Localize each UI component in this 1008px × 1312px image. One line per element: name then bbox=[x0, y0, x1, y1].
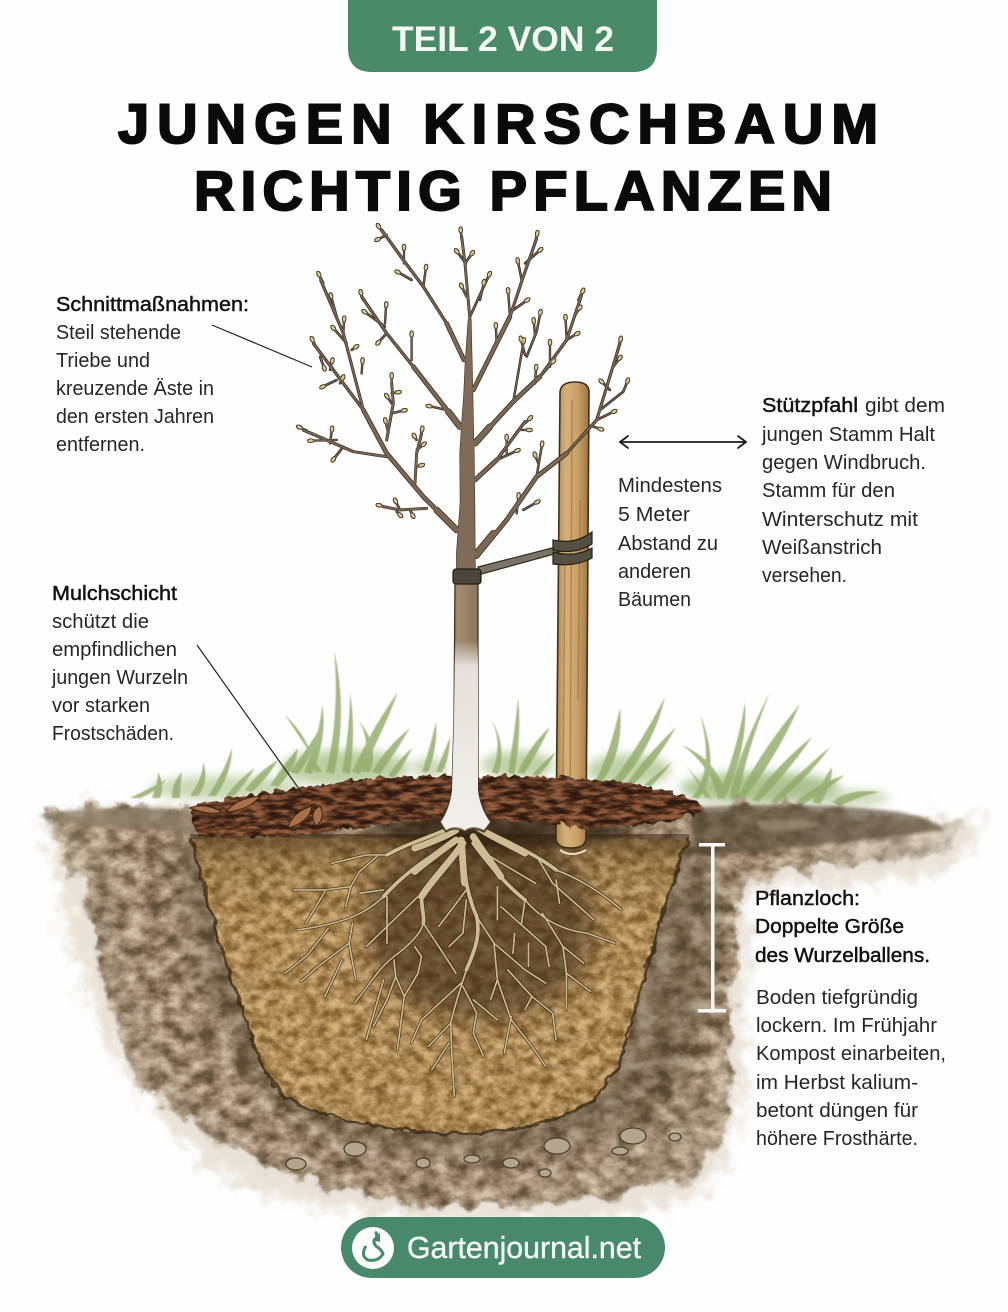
icon: sprout logo bbox=[352, 1227, 394, 1269]
callout: Mulchschicht: vor starken bbox=[52, 695, 150, 717]
tree tie strap between trunk and stake bbox=[453, 532, 592, 584]
callout: Schnittmassnahmen: den ersten Jahren bbox=[56, 406, 214, 428]
callout: Pflanzloch: Doppelte Größe bbox=[755, 916, 904, 938]
callout: Pflanzloch bbox=[755, 888, 946, 1150]
support stake bbox=[556, 382, 589, 854]
topsoil crust left bbox=[38, 808, 198, 832]
callout: Mulchschicht: Mulchschicht bbox=[52, 583, 177, 605]
callout: Stuetzpfahl: versehen. bbox=[762, 565, 847, 587]
footer pill: Gartenjournal.net bbox=[341, 1217, 665, 1278]
callout: Schnittmassnahmen: Triebe und bbox=[56, 350, 150, 372]
callout: Schnittmassnahmen: kreuzende Äste in bbox=[56, 378, 214, 400]
planting hole filled with loose soil bbox=[190, 812, 690, 1134]
depth marker bar bbox=[698, 843, 726, 1012]
callout: Stuetzpfahl: Weißanstrich bbox=[762, 537, 882, 559]
young tree with trunk and crown bbox=[302, 228, 627, 832]
root system bbox=[285, 827, 622, 1096]
header badge: Teil 2 von 2: TEIL 2 VON 2 bbox=[392, 20, 614, 59]
callout: Stuetzpfahl: gegen Windbruch. bbox=[762, 452, 926, 474]
callout: Stuetzpfahl: gibt dem bbox=[865, 395, 945, 417]
topsoil crust right with grass tufts bbox=[690, 805, 945, 854]
callout: Mulchschicht: empfindlichen bbox=[52, 639, 177, 661]
callout: minimum spacing: 5 Meter bbox=[618, 504, 690, 526]
callout: Pflanzloch: im Herbst kalium- bbox=[756, 1072, 918, 1094]
callout: Schnittmassnahmen bbox=[56, 294, 249, 456]
callout: minimum spacing bbox=[618, 475, 722, 611]
callout: minimum spacing: anderen bbox=[618, 561, 691, 583]
crown branches and buds bbox=[302, 228, 627, 600]
title: RICHTIG PFLANZEN bbox=[194, 159, 832, 222]
callout: Stuetzpfahl bbox=[761, 395, 945, 587]
callout: Pflanzloch: betont düngen für bbox=[756, 1100, 918, 1122]
callout: minimum spacing: Abstand zu bbox=[618, 533, 718, 555]
pebbles in the subsoil bbox=[286, 1128, 681, 1177]
leader line to crown bbox=[212, 325, 312, 367]
mulch layer bbox=[190, 776, 702, 838]
icon: fallen leaves on the mulch bbox=[190, 796, 322, 828]
callout: Mulchschicht: jungen Wurzeln bbox=[51, 667, 188, 689]
callout: Mulchschicht bbox=[51, 583, 188, 745]
trunk bbox=[439, 575, 492, 832]
header badge: Teil 2 von 2 bbox=[348, 0, 657, 72]
callout: Pflanzloch: des Wurzelballens. bbox=[755, 945, 930, 967]
callout: Pflanzloch: höhere Frosthärte. bbox=[756, 1128, 918, 1150]
callout: Stuetzpfahl: Winterschutz mit bbox=[762, 509, 918, 531]
callout: Stuetzpfahl: jungen Stamm Halt bbox=[761, 424, 935, 446]
callout: Stuetzpfahl: Stützpfahl bbox=[762, 395, 858, 417]
callout: Schnittmassnahmen: Steil stehende bbox=[56, 322, 181, 344]
callout: Mulchschicht: Frostschäden. bbox=[52, 723, 174, 745]
grass behind the mulch bbox=[130, 650, 890, 806]
callout: Pflanzloch: Boden tiefgründig bbox=[756, 987, 918, 1009]
callout: minimum spacing: Mindestens bbox=[618, 475, 722, 497]
surrounding soil: cross-section of the ground bbox=[38, 805, 963, 1206]
callout: Pflanzloch: Kompost einarbeiten, bbox=[756, 1043, 946, 1065]
callout: Pflanzloch: lockern. Im Frühjahr bbox=[756, 1015, 937, 1037]
callout: minimum spacing: Bäumen bbox=[618, 589, 691, 611]
title: JUNGEN KIRSCHBAUM bbox=[118, 92, 878, 155]
callout: Pflanzloch: Pflanzloch: bbox=[755, 888, 860, 910]
title bbox=[118, 92, 878, 222]
leader line to mulch bbox=[197, 645, 304, 796]
callout: Stuetzpfahl: Stamm für den bbox=[762, 480, 895, 502]
pale watercolor edge of the ground bbox=[45, 805, 976, 1224]
footer pill: Gartenjournal.net: Gartenjournal.net bbox=[407, 1230, 641, 1265]
callout: Schnittmassnahmen: Schnittmaßnahmen: bbox=[56, 294, 249, 316]
distance arrow bbox=[620, 436, 746, 448]
callout: Mulchschicht: schützt die bbox=[52, 611, 149, 633]
callout: Schnittmassnahmen: entfernen. bbox=[56, 434, 145, 456]
